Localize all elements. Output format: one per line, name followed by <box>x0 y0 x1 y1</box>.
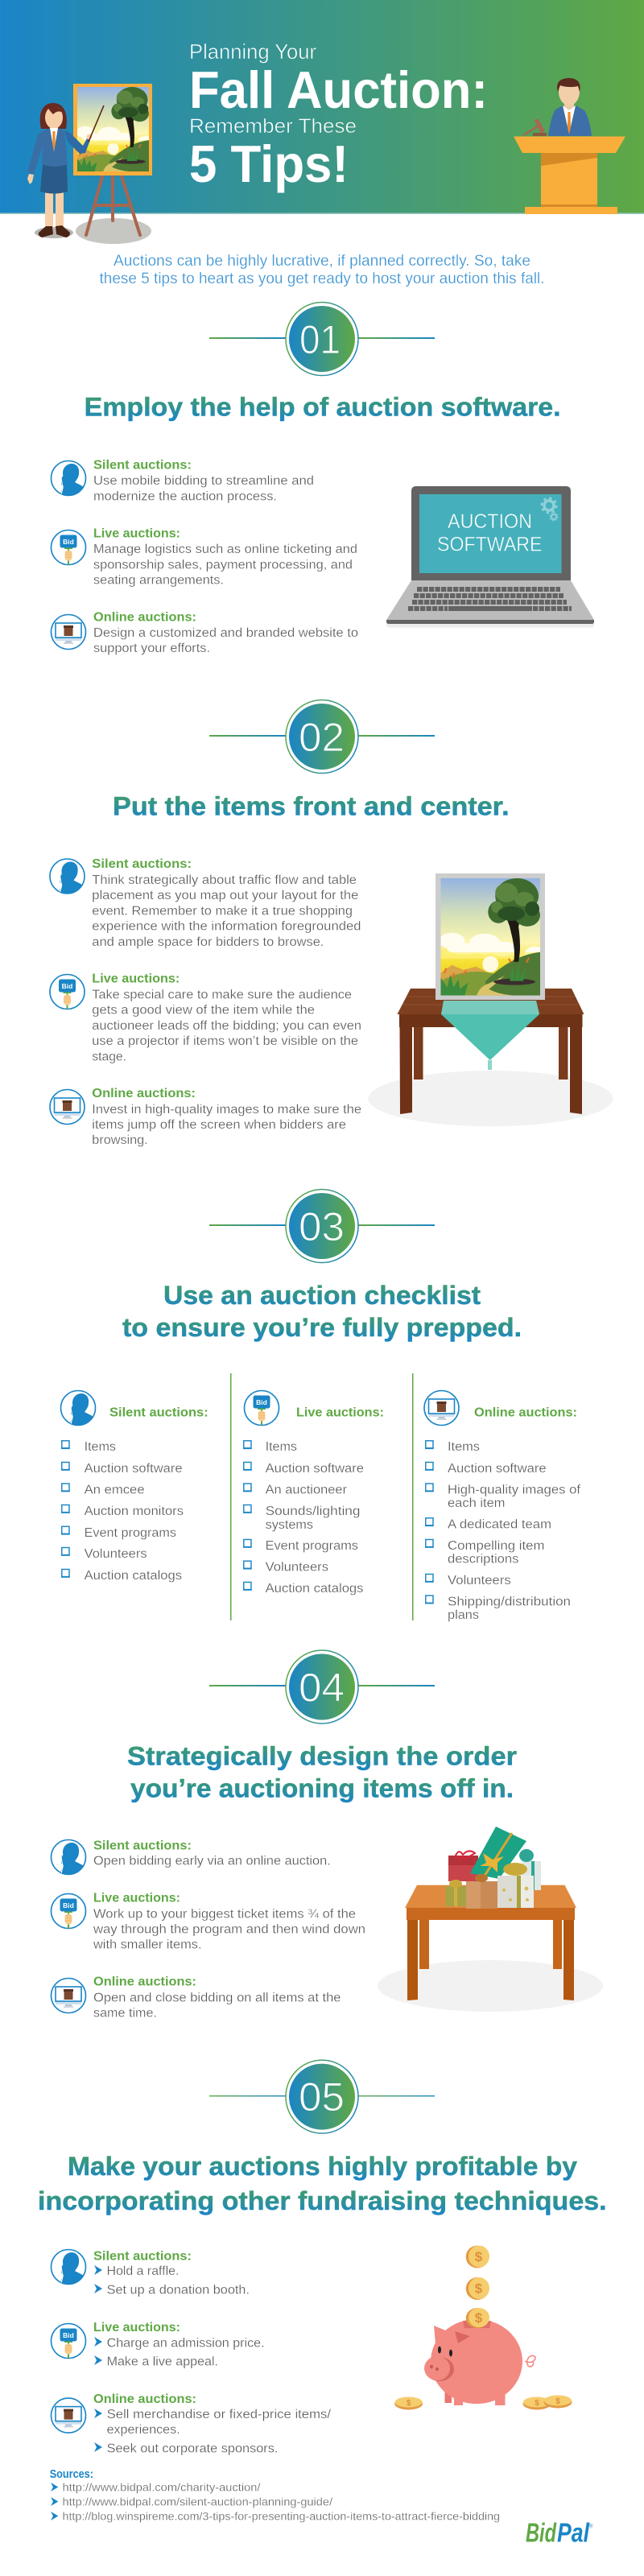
column: online auctions checklist: Auction software <box>448 1462 547 1476</box>
pig: $ <box>475 2310 483 2326</box>
badge 01 <box>209 303 435 375</box>
coins on ground <box>394 2396 572 2410</box>
column: silent auctions checklist: Volunteers <box>85 1547 147 1561</box>
heading: tip 1: Employ the help of auction software. <box>85 393 561 422</box>
column: online auctions checklist: A dedicated team <box>448 1517 551 1531</box>
item: live auctions <box>52 1892 365 1952</box>
item: silent auctions: Hold a raffle. <box>107 2264 179 2278</box>
column: online auctions checklist: Online auctions: <box>474 1406 577 1420</box>
illustration: easel with painting <box>73 84 154 244</box>
item: live auctions: Live auctions: <box>93 2321 180 2334</box>
item: live auctions: Make a live appeal. <box>107 2355 218 2369</box>
header title: Fall Auction: <box>189 60 488 119</box>
intro text: these 5 tips to heart as you get ready to host your auction this fall. <box>100 270 544 287</box>
panel: tip 5 <box>38 2060 607 2455</box>
item: silent auctions <box>52 1839 331 1876</box>
column: live auctions checklist: Live auctions: <box>296 1406 384 1420</box>
illustration: auctioneer at podium <box>514 78 625 214</box>
column: online auctions checklist: Volunteers <box>448 1574 511 1587</box>
item: silent auctions: Use mobile bidding to streamline and <box>93 474 314 488</box>
item: silent auctions: placement as you map out your layout for the <box>92 889 358 902</box>
item: live auctions: Bid <box>62 982 72 990</box>
logo: BidPal <box>526 2517 593 2547</box>
item: online auctions: browsing. <box>92 1133 148 1147</box>
column: live auctions checklist: Items <box>266 1440 297 1454</box>
badge 02: 02 <box>299 715 345 760</box>
column: silent auctions checklist: Auction catalogs <box>85 1569 182 1583</box>
panel: tip 3 <box>61 1190 581 1622</box>
item: silent auctions: Silent auctions: <box>93 2249 192 2263</box>
item: silent auctions <box>50 857 361 949</box>
badge 01: 01 <box>299 317 341 362</box>
illustration: table with framed painting <box>368 873 613 1126</box>
item: online auctions: Online auctions: <box>92 1087 196 1100</box>
heading: tip 5 <box>38 2152 607 2215</box>
panel: tip 4 <box>52 1650 603 2021</box>
item: online auctions <box>50 1087 361 1147</box>
column: live auctions checklist: Event programs <box>266 1539 358 1553</box>
item: silent auctions: Set up a donation booth. <box>107 2283 250 2297</box>
coin: falling top <box>466 2246 489 2268</box>
intro text <box>100 253 544 287</box>
header title: 5 Tips! <box>189 134 349 193</box>
logo: BidPal: Pal <box>557 2517 590 2547</box>
header title <box>189 39 488 193</box>
illustration: laptop with auction software: SOFTWARE <box>437 534 543 556</box>
item: live auctions: Charge an admission price. <box>107 2336 265 2350</box>
item: online auctions <box>52 1975 341 2021</box>
item: online auctions: Online auctions: <box>93 1975 196 1989</box>
item: live auctions: auctioneer leads off the bidding; you can even <box>92 1019 361 1033</box>
sources: http://blog.winspireme.com/3-tips-for-presenting-auction-items-to-attract-fierce-bidding <box>63 2510 500 2523</box>
item: live auctions: sponsorship sales, payment processing, and <box>93 558 353 572</box>
panel: tip 1 <box>52 303 594 655</box>
gift: red box <box>448 1851 478 1881</box>
column: silent auctions checklist: Event programs <box>85 1526 176 1540</box>
pig <box>424 2308 535 2405</box>
item: online auctions: Online auctions: <box>93 611 196 625</box>
column: online auctions checklist: Compelling item <box>448 1539 544 1553</box>
item: silent auctions: modernize the auction process. <box>93 490 277 504</box>
heading: tip 3: to ensure you’re fully prepped. <box>122 1313 522 1342</box>
gift: large green box <box>470 1827 526 1879</box>
column: silent auctions checklist: Items <box>85 1440 116 1454</box>
intro text: Auctions can be highly lucrative, if planned correctly. So, take <box>114 253 530 270</box>
column: online auctions checklist: plans <box>448 1608 479 1622</box>
illustration: laptop with auction software <box>386 486 594 628</box>
heading: tip 4 <box>127 1742 517 1803</box>
badge 05: 05 <box>299 2074 345 2120</box>
column: live auctions checklist: systems <box>266 1518 313 1532</box>
badge 05 <box>209 2060 435 2133</box>
header title: Planning Your <box>189 39 316 64</box>
item: silent auctions <box>52 459 314 504</box>
badge 03 <box>209 1190 435 1262</box>
column: silent auctions checklist: Auction software <box>85 1462 182 1476</box>
item: live auctions: Take special care to make sure the audience <box>92 988 352 1001</box>
heading: tip 4: Strategically design the order <box>127 1742 517 1771</box>
item: live auctions: Bid <box>63 1901 74 1909</box>
sources: Sources: <box>50 2468 93 2481</box>
item: silent auctions: Silent auctions: <box>93 1839 192 1852</box>
item: live auctions: seating arrangements. <box>93 574 224 588</box>
item: live auctions: Work up to your biggest ticket items ¾ of the <box>93 1907 356 1921</box>
item: live auctions: stage. <box>92 1050 126 1063</box>
item: online auctions: support your efforts. <box>93 642 210 655</box>
item: live auctions: way through the program and then wind down <box>93 1923 365 1937</box>
coins on ground: $ <box>555 2397 560 2406</box>
logo: BidPal: Bid <box>526 2517 557 2547</box>
badge 04: 04 <box>299 1665 345 1710</box>
column: online auctions checklist <box>424 1391 581 1622</box>
item: live auctions: Bid <box>63 538 74 546</box>
item: silent auctions: Think strategically about traffic flow and table <box>92 873 357 887</box>
column: silent auctions checklist <box>61 1391 208 1583</box>
illustration: piggy bank with coins <box>394 2246 572 2410</box>
column: live auctions checklist: Sounds/lighting <box>266 1505 361 1518</box>
item: live auctions <box>52 2321 265 2369</box>
item: live auctions: Live auctions: <box>92 972 180 986</box>
illustration: presenter woman <box>27 103 104 238</box>
column: online auctions checklist: High-quality images of <box>448 1483 581 1497</box>
gift: white box with gold ribbon <box>497 1863 534 1908</box>
gift: olive box <box>446 1880 466 1906</box>
item: online auctions <box>52 2392 332 2455</box>
coins on ground: $ <box>407 2399 411 2408</box>
badge 04 <box>209 1650 435 1724</box>
sources <box>50 2468 500 2523</box>
logo: BidPal: ® <box>589 2524 593 2529</box>
badge 02 <box>209 700 435 773</box>
column: live auctions checklist: Bid <box>256 1398 267 1406</box>
item: silent auctions <box>52 2249 250 2297</box>
coin: falling middle <box>466 2277 489 2300</box>
item: live auctions: gets a good view of the item while the <box>92 1004 315 1018</box>
heading: tip 2: Put the items front and center. <box>113 791 510 820</box>
item: online auctions: Sell merchandise or fixed-price items/ <box>107 2408 332 2421</box>
item: online auctions: same time. <box>93 2007 157 2021</box>
column: silent auctions checklist: An emcee <box>85 1483 145 1497</box>
item: silent auctions: and ample space for bidders to browse. <box>92 935 324 949</box>
gift: tan box <box>466 1874 497 1909</box>
coin: falling middle: $ <box>475 2281 483 2296</box>
item: online auctions: experiences. <box>107 2423 180 2437</box>
item: live auctions: Live auctions: <box>93 1892 180 1905</box>
item: live auctions: with smaller items. <box>93 1938 201 1952</box>
heading: tip 5: incorporating other fundraising techniques. <box>38 2186 607 2215</box>
item: silent auctions: Open bidding early via an online auction. <box>93 1855 331 1868</box>
item: live auctions: Live auctions: <box>93 527 180 541</box>
gift: back white box <box>519 1849 541 1890</box>
panel: header banner <box>0 0 644 244</box>
column: online auctions checklist: each item <box>448 1496 506 1510</box>
heading: tip 5: Make your auctions highly profitable by <box>68 2152 577 2181</box>
item: online auctions: items jump off the screen when bidders are <box>92 1118 346 1132</box>
item: online auctions: Seek out corporate sponsors. <box>107 2442 278 2455</box>
item: live auctions: use a projector if items won’t be visible on the <box>92 1034 358 1048</box>
item: silent auctions: event. Remember to make it a true shopping <box>92 904 353 918</box>
item: online auctions <box>52 611 358 655</box>
panel: tip 2 <box>50 700 613 1147</box>
column: online auctions checklist: Items <box>448 1440 480 1454</box>
item: online auctions: Open and close bidding on all items at the <box>93 1991 341 2004</box>
item: silent auctions: experience with the information foregrounded <box>92 920 361 934</box>
column: live auctions checklist: Auction catalogs <box>266 1582 364 1596</box>
column: live auctions checklist: Volunteers <box>266 1561 328 1575</box>
column: silent auctions checklist: Silent auctions: <box>109 1406 208 1420</box>
item: live auctions <box>52 527 357 588</box>
column: live auctions checklist <box>243 1391 384 1596</box>
item: live auctions: Bid <box>63 2331 74 2339</box>
header title: Remember These <box>189 115 357 138</box>
sources: http://www.bidpal.com/silent-auction-planning-guide/ <box>63 2496 332 2508</box>
item: silent auctions: Silent auctions: <box>93 459 192 473</box>
column: live auctions checklist: An auctioneer <box>266 1483 347 1497</box>
illustration: laptop with auction software: AUCTION <box>448 510 532 533</box>
coins on ground: $ <box>535 2399 539 2408</box>
column: live auctions checklist: Auction software <box>266 1462 364 1476</box>
coin: falling top: $ <box>475 2249 483 2264</box>
heading: tip 4: you’re auctioning items off in. <box>130 1774 514 1803</box>
heading: tip 3: Use an auction checklist <box>163 1281 481 1310</box>
item: online auctions: Online auctions: <box>93 2392 196 2406</box>
heading: tip 3 <box>122 1281 522 1342</box>
illustration: table with gifts <box>378 1827 603 2012</box>
column: online auctions checklist: Shipping/distribution <box>448 1596 571 1609</box>
item: online auctions: Design a customized and branded website to <box>93 626 358 640</box>
item: silent auctions: Silent auctions: <box>92 857 192 871</box>
item: online auctions: Invest in high-quality images to make sure the <box>92 1103 361 1117</box>
badge 03: 03 <box>299 1204 345 1249</box>
item: live auctions: Manage logistics such as online ticketing and <box>93 543 357 556</box>
column: online auctions checklist: descriptions <box>448 1552 519 1566</box>
item: live auctions <box>50 972 361 1063</box>
column: silent auctions checklist: Auction monitors <box>85 1505 184 1518</box>
sources: http://www.bidpal.com/charity-auction/ <box>63 2482 261 2494</box>
